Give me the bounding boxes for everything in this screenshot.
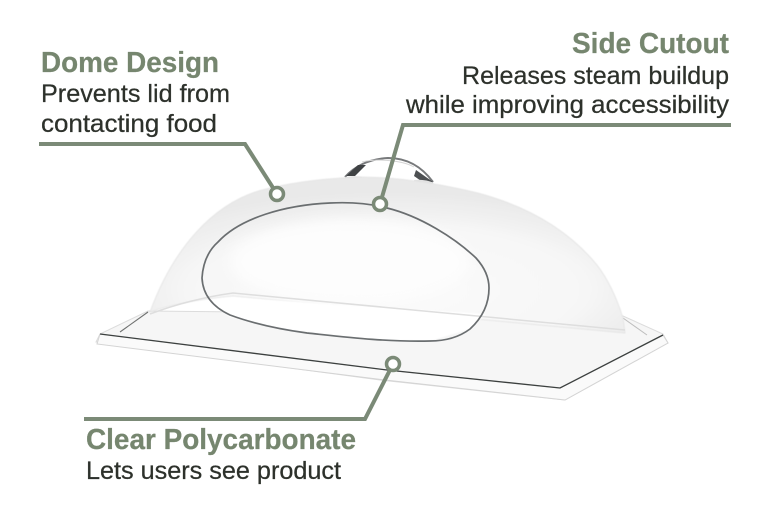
callout: side cutout xyxy=(374,28,731,210)
heading: clear polycarbonate: Clear Polycarbonate xyxy=(86,424,356,456)
text: clear polycarbonate description: Lets users see product xyxy=(86,457,341,485)
marker: clear polycarbonate xyxy=(386,358,400,370)
text: side cutout description: Releases steam buildup xyxy=(462,62,729,90)
tray base xyxy=(96,311,668,400)
text: dome design description: Prevents lid from xyxy=(41,80,230,108)
marker: side cutout xyxy=(374,198,386,210)
opening lower band xyxy=(214,298,486,341)
dome highlight xyxy=(230,220,470,304)
text: side cutout description: while improving accessibility xyxy=(405,91,730,119)
text: side cutout description xyxy=(405,62,730,119)
text: dome design description: contacting food xyxy=(41,110,217,138)
callout: clear polycarbonate xyxy=(84,358,400,485)
product: clear dome cover xyxy=(96,158,668,400)
callout: dome design xyxy=(39,47,284,200)
text: dome design description xyxy=(41,80,230,138)
icon: metal handle xyxy=(343,158,434,187)
leader line: side cutout xyxy=(380,125,731,204)
leader line: clear polycarbonate xyxy=(84,364,393,419)
rim line xyxy=(150,293,625,330)
side cutout outline xyxy=(202,203,489,341)
leader line: dome design xyxy=(39,144,277,194)
heading: dome design: Dome Design xyxy=(41,47,219,79)
dome body xyxy=(150,177,625,333)
heading: side cutout: Side Cutout xyxy=(572,28,729,60)
marker: dome design xyxy=(270,188,284,200)
